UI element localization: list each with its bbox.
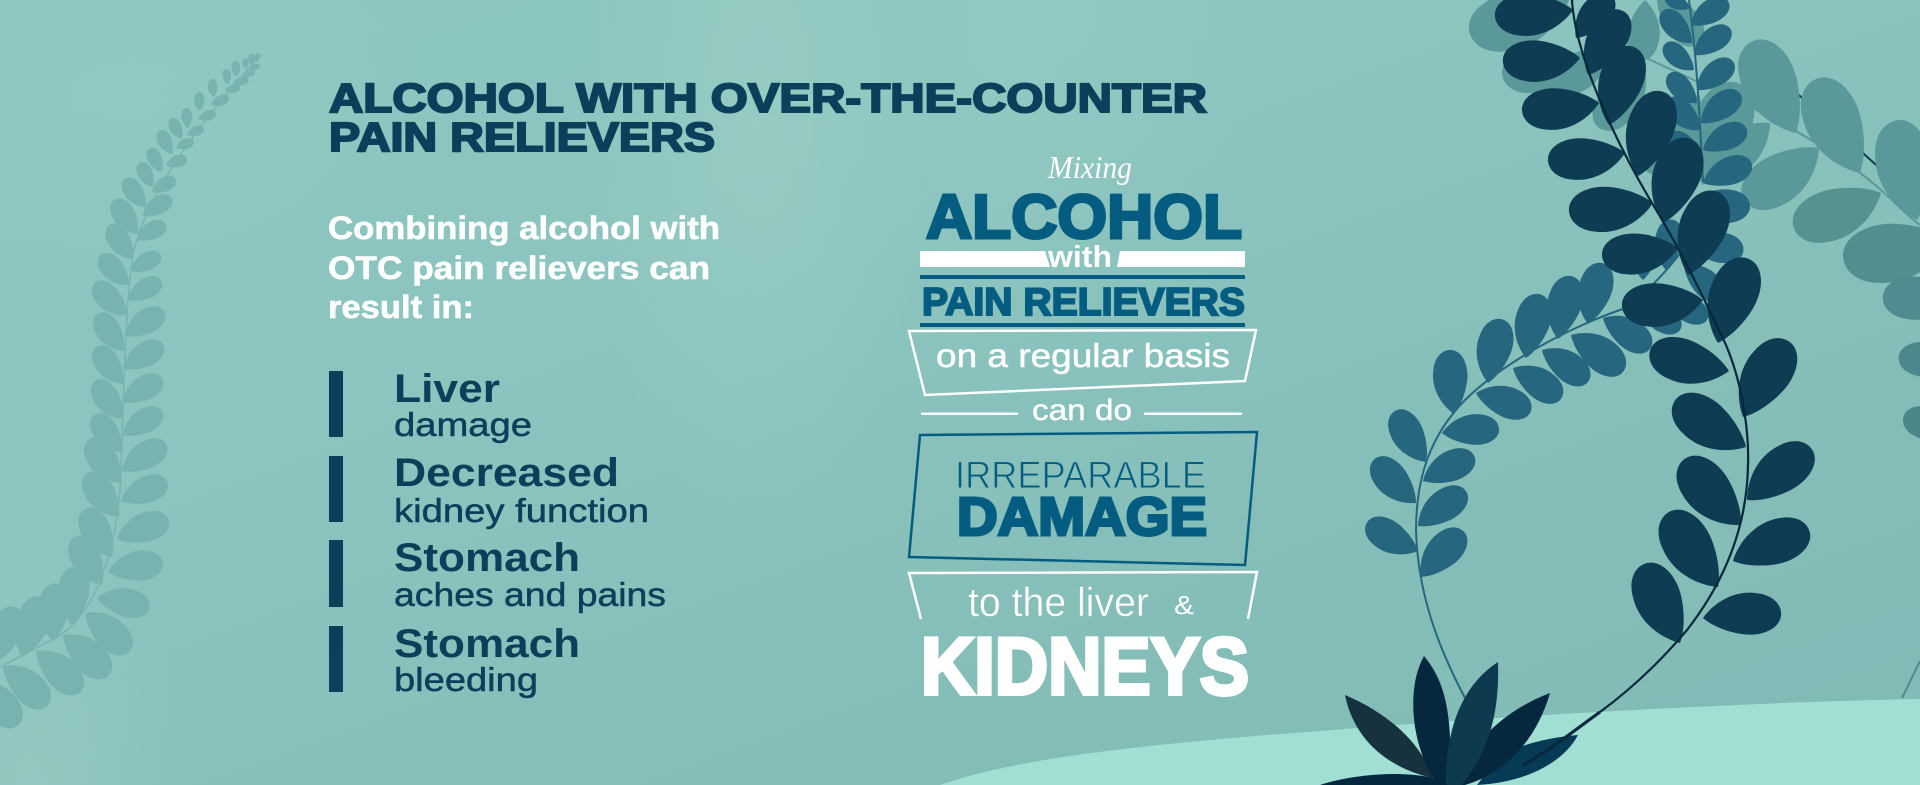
box: on a regular basis: on a regular basis [936, 337, 1230, 374]
title [329, 75, 1207, 160]
item: stomach aches and pains: aches and pains [394, 576, 666, 613]
item: stomach aches and pains: Stomach [394, 536, 580, 580]
box: irreparable damage: DAMAGE [957, 487, 1207, 547]
intro text [328, 210, 720, 325]
dark main vine [1494, 0, 1824, 653]
text: ALCOHOL: ALCOHOL [926, 183, 1242, 252]
intro text: Combining alcohol with [328, 210, 720, 246]
box: irreparable damage [909, 432, 1257, 565]
potted plant base petals [1320, 656, 1578, 785]
box: irreparable damage: IRREPARABLE [955, 455, 1206, 497]
PAIN RELIEVERS banner: PAIN RELIEVERS [922, 281, 1245, 324]
effects list [329, 367, 666, 698]
item: liver damage [329, 367, 532, 443]
decorative fern at left [0, 53, 262, 736]
item: decreased kidney function: kidney function [394, 492, 649, 529]
intro text: result in: [328, 289, 474, 325]
title: ALCOHOL WITH OVER-THE-COUNTER [329, 75, 1207, 121]
with banner: with [1047, 239, 1112, 274]
bracket: to the liver and: to the liver [968, 579, 1149, 625]
main vine stem [1523, 0, 1748, 765]
bracket: to the liver and: & [1174, 590, 1194, 620]
bracket: to the liver and [909, 572, 1257, 625]
can do: can do [1032, 394, 1132, 427]
title: PAIN RELIEVERS [329, 114, 715, 160]
faded background vine [1462, 0, 1920, 698]
item: liver damage: Liver [394, 367, 500, 411]
text: Mixing: Mixing [1047, 149, 1132, 185]
item: stomach bleeding [329, 622, 580, 698]
ground hill [940, 699, 1920, 785]
box: on a regular basis [909, 330, 1256, 395]
item: decreased kidney function: Decreased [394, 451, 619, 495]
item: stomach bleeding: bleeding [394, 661, 538, 698]
with banner [920, 239, 1245, 274]
typographic poster [909, 149, 1257, 712]
item: stomach bleeding: Stomach [394, 622, 580, 666]
intro text: OTC pain relievers can [328, 250, 710, 286]
medium blue vine [1359, 0, 1756, 698]
item: decreased kidney function [329, 451, 649, 529]
item: liver damage: damage [394, 406, 532, 443]
text: KIDNEYS: KIDNEYS [921, 622, 1249, 712]
item: stomach aches and pains [329, 536, 666, 613]
